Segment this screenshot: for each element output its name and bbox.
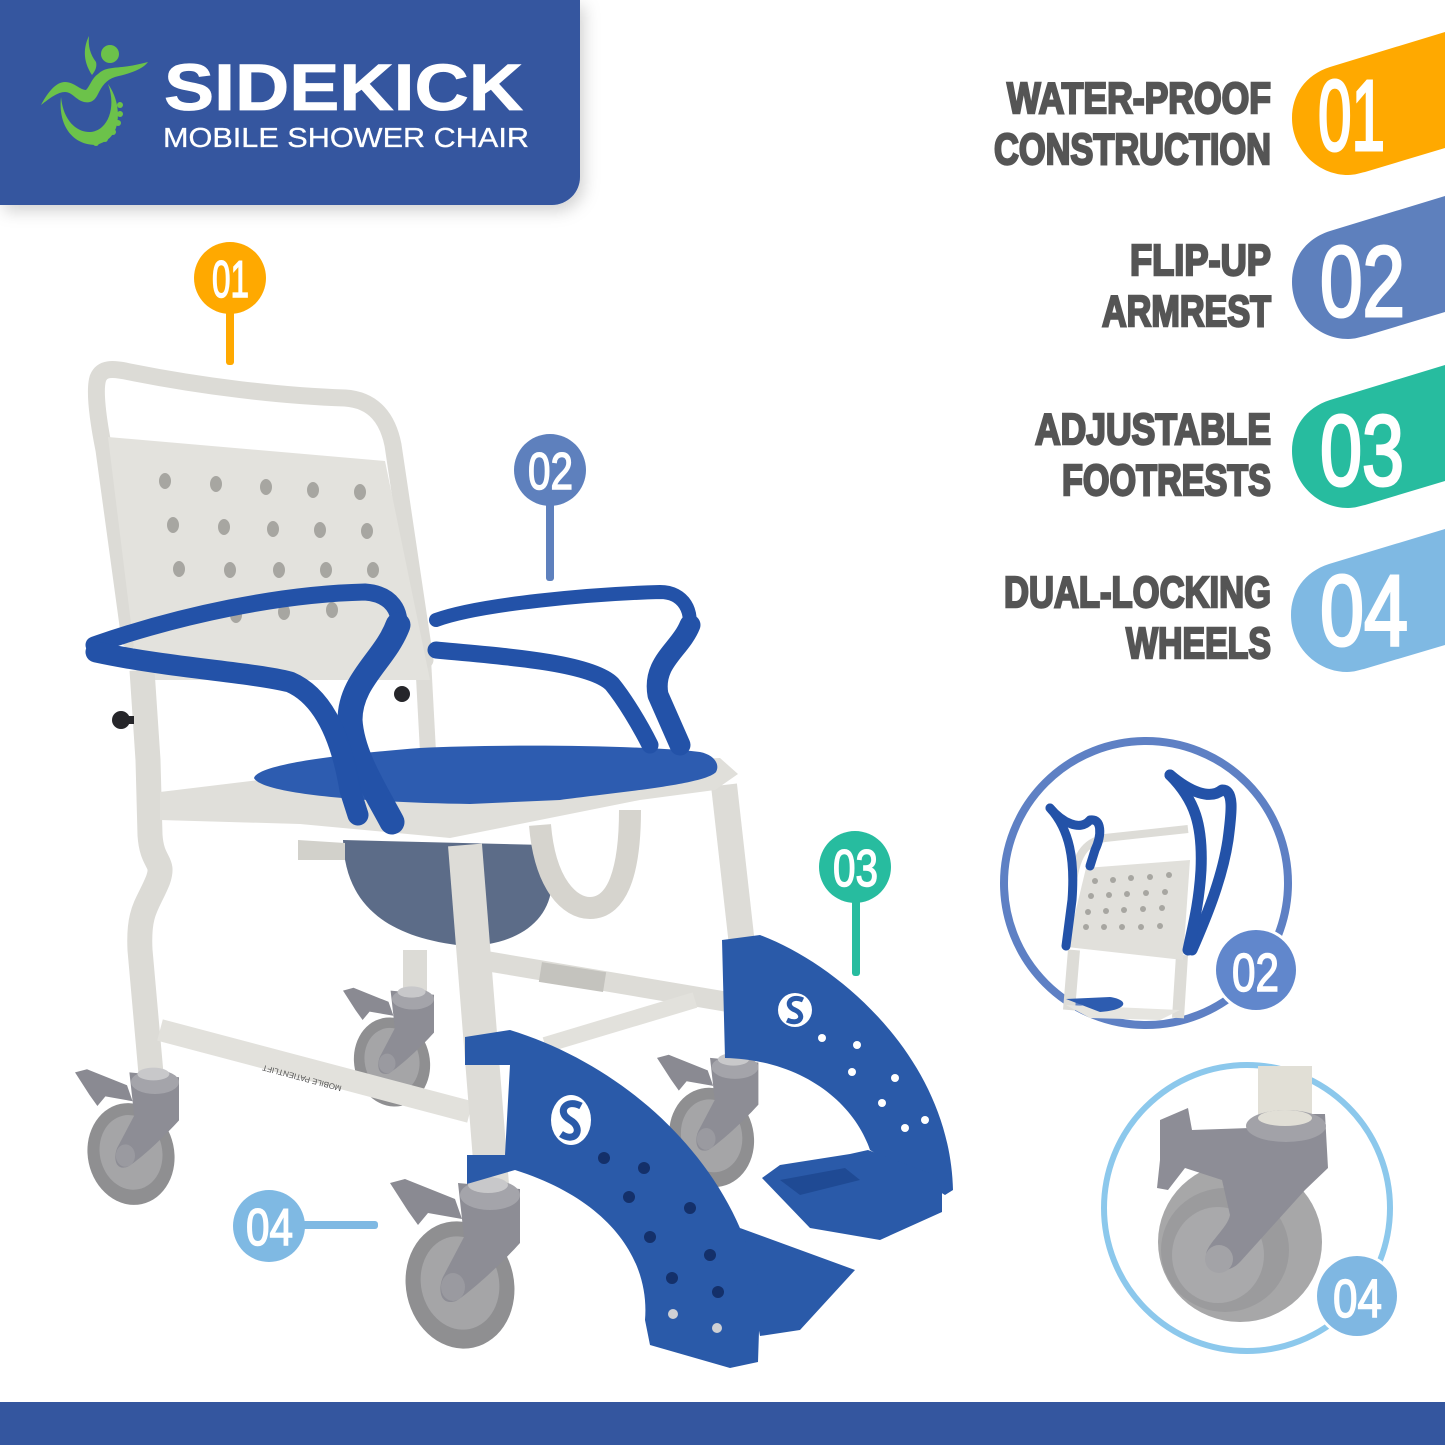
U pipe xyxy=(540,810,630,908)
front left caster xyxy=(390,1177,526,1359)
left front leg xyxy=(465,845,492,1185)
feature 02: flip-up armrest xyxy=(1102,196,1445,339)
feature 04: dual-locking wheels: 04 xyxy=(1320,555,1408,667)
badge 02 xyxy=(1213,927,1299,1013)
feature 02: flip-up armrest: 02 xyxy=(1320,226,1405,338)
callout 02: 02 xyxy=(528,443,573,501)
left side bar xyxy=(160,1030,470,1112)
backrest frame xyxy=(96,370,425,660)
left armrest xyxy=(94,592,399,822)
callout 03 xyxy=(819,831,891,976)
right front leg xyxy=(724,785,742,945)
commode bucket xyxy=(343,840,552,946)
feature 04: dual-locking wheels: DUAL-LOCKING xyxy=(1004,568,1271,617)
adjustment knobs xyxy=(112,686,410,729)
feature 03: adjustable footrests: ADJUSTABLE xyxy=(1035,405,1271,454)
brand name: SIDEKICK xyxy=(164,50,523,124)
callout 02 xyxy=(514,434,586,581)
feature 04: dual-locking wheels: WHEELS xyxy=(1126,619,1271,668)
callout 01 xyxy=(194,242,266,365)
feature 01: water-proof construction: 01 xyxy=(1318,60,1385,172)
feature 04: dual-locking wheels xyxy=(1004,529,1445,672)
inset frame and panel xyxy=(1069,950,1182,1018)
inset: wheel detail: 04 xyxy=(1333,1269,1382,1329)
callout 01: 01 xyxy=(212,251,249,309)
chair rear left post xyxy=(140,670,160,1085)
feature 03: adjustable footrests: FOOTRESTS xyxy=(1062,456,1271,505)
right armrest xyxy=(436,592,690,745)
inset: wheel detail xyxy=(1104,1065,1400,1351)
header banner xyxy=(0,0,580,205)
footer bar xyxy=(0,1402,1445,1445)
feature 01: water-proof construction: CONSTRUCTION xyxy=(994,125,1271,174)
shower chair illustration xyxy=(75,370,953,1368)
feature 01: water-proof construction xyxy=(994,32,1445,175)
icon: green logo xyxy=(41,36,148,146)
feature 02: flip-up armrest: ARMREST xyxy=(1102,287,1271,336)
inset seat cushion xyxy=(1066,997,1123,1012)
left footrest xyxy=(465,1030,855,1368)
bar label: MOBILE PATIENTLIFT xyxy=(261,1063,343,1093)
rear left caster xyxy=(75,1068,184,1213)
backrest panel xyxy=(108,437,430,680)
inset wheel xyxy=(1158,1162,1322,1322)
rear casters xyxy=(343,986,763,1195)
subtitle: MOBILE SHOWER CHAIR xyxy=(163,122,529,153)
callout 03: 03 xyxy=(833,840,878,898)
badge 04 xyxy=(1314,1253,1400,1339)
rear cross bars xyxy=(415,950,728,1045)
chair back post right xyxy=(422,640,428,752)
seat tray xyxy=(160,758,738,838)
feature 03: adjustable footrests: 03 xyxy=(1320,395,1404,507)
inset flipped armrests xyxy=(1050,775,1231,950)
right footrest xyxy=(722,935,953,1240)
callout 04 xyxy=(233,1190,378,1262)
inset collar xyxy=(1246,1110,1326,1142)
inset: armrest detail xyxy=(1004,741,1299,1025)
inset fork and brake xyxy=(1157,1108,1328,1270)
feature 03: adjustable footrests xyxy=(1035,365,1445,508)
seat cushion xyxy=(254,746,717,804)
feature 01: water-proof construction: WATER-PROOF xyxy=(1007,74,1271,123)
callout 04: 04 xyxy=(246,1199,293,1257)
inset post xyxy=(1258,1066,1312,1122)
feature 02: flip-up armrest: FLIP-UP xyxy=(1130,236,1271,285)
inset: armrest detail: 02 xyxy=(1232,943,1279,1003)
